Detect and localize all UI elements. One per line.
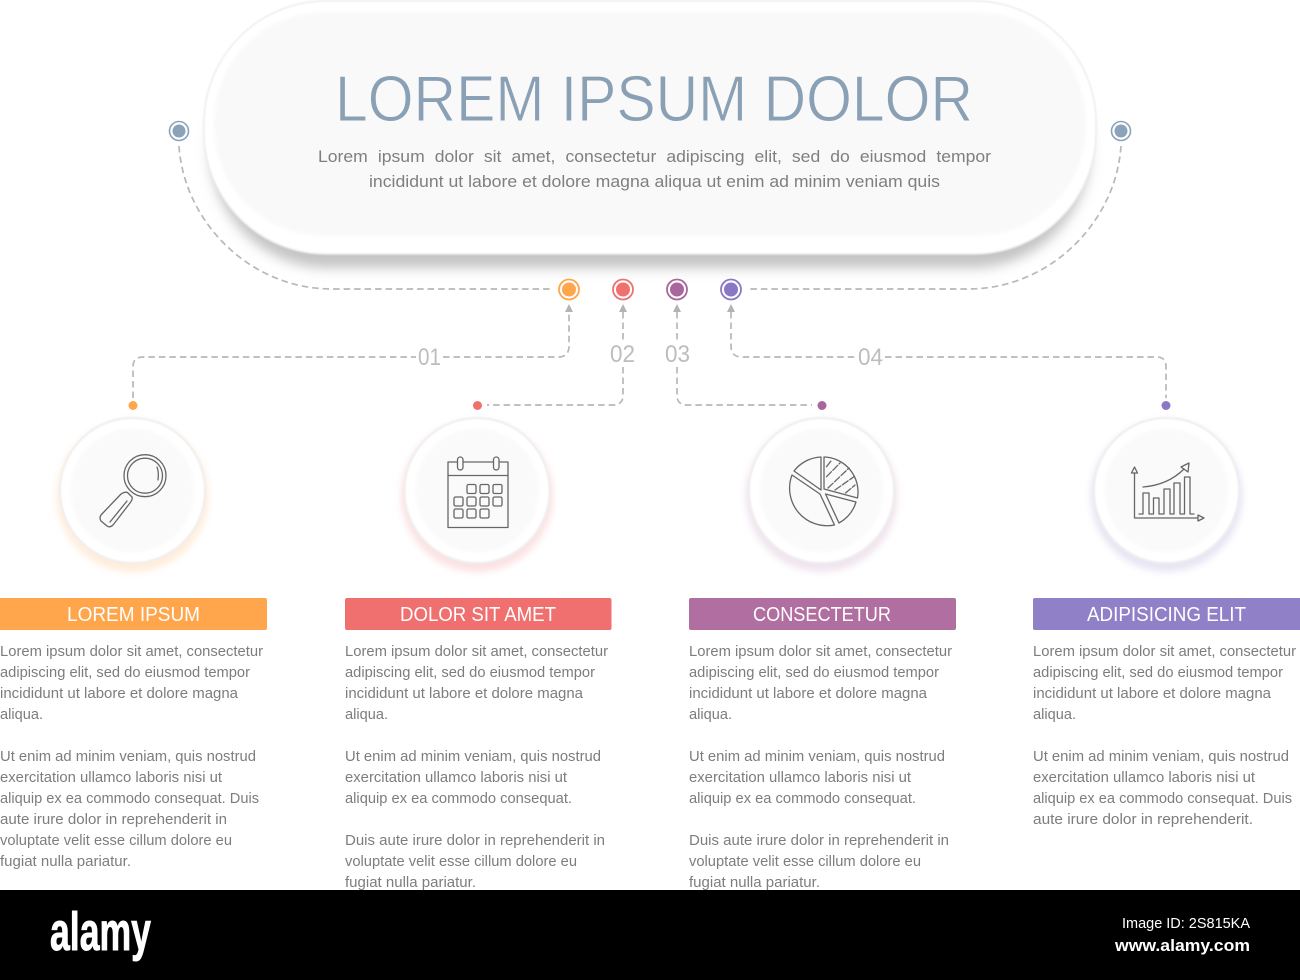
text block: column 4: aliqua. <box>1033 707 1076 723</box>
text block: column 2: Lorem ipsum dolor sit amet, consectetur <box>345 644 608 660</box>
panel: column 2 circle with calendar icon <box>401 418 553 572</box>
text block: column 3: aliqua. <box>689 707 732 723</box>
footer: watermark strip <box>0 890 1300 980</box>
text block: column 2: fugiat nulla pariatur. <box>345 875 476 891</box>
header bar: Lorem Ipsum <box>0 598 267 630</box>
dot: column 1 <box>128 401 138 410</box>
text block: column 3: Lorem ipsum dolor sit amet, consectetur <box>689 644 952 660</box>
marker: right node <box>1112 122 1130 140</box>
connector 03 with arrow <box>673 304 812 405</box>
text block: column 4: aute irure dolor in reprehenderit. <box>1033 812 1253 828</box>
header bar: Consectetur <box>689 598 956 630</box>
icon: growth chart <box>1132 463 1204 521</box>
panel: column 1 circle with magnifier icon <box>56 418 208 572</box>
text block: column 2: incididunt ut labore et dolore magna <box>345 686 584 702</box>
text block: column 1: fugiat nulla pariatur. <box>0 854 131 870</box>
text block: column 1: Ut enim ad minim veniam, quis nostrud <box>0 749 256 765</box>
icon: magnifier <box>100 455 166 527</box>
marker: purple node <box>667 280 687 300</box>
dot: column 4 <box>1162 401 1170 410</box>
text block: column 4: adipiscing elit, sed do eiusmod tempor <box>1033 665 1283 681</box>
text block: column 3 <box>689 644 952 891</box>
step number 01: 01 <box>418 344 441 371</box>
text block: column 1: Lorem ipsum dolor sit amet, consectetur <box>0 644 263 660</box>
dot: column 3 <box>818 401 826 410</box>
header bar: Dolor Sit Amet <box>345 598 612 630</box>
text block: column 3: fugiat nulla pariatur. <box>689 875 820 891</box>
header bar: Dolor Sit Amet: DOLOR SIT AMET <box>400 604 556 626</box>
text block: column 2: voluptate velit esse cillum dolore eu <box>345 854 577 870</box>
marker: violet node <box>721 280 741 300</box>
footer image id: Image ID: 2S815KA <box>1122 915 1250 932</box>
marker: orange node <box>559 280 579 300</box>
panel: column 4 circle with growth chart icon <box>1090 418 1242 572</box>
footer logo: alamy <box>50 902 151 962</box>
panel: column 3 circle with pie chart icon <box>746 418 898 572</box>
text block: column 4: Ut enim ad minim veniam, quis nostrud <box>1033 749 1289 765</box>
step number 04: 04 <box>858 344 883 371</box>
panel: main title pill <box>204 1 1096 268</box>
header bar: Adipisicing Elit: ADIPISICING ELIT <box>1087 604 1246 626</box>
subtitle text: Lorem ipsum dolor sit amet, consectetur adipiscing elit, sed do eiusmod tempor <box>318 147 991 166</box>
text block: column 4: incididunt ut labore et dolore magna <box>1033 686 1272 702</box>
text block: column 2: Duis aute irure dolor in reprehenderit in <box>345 833 605 849</box>
text block: column 3: Duis aute irure dolor in reprehenderit in <box>689 833 949 849</box>
icon: calendar <box>448 457 508 528</box>
text block: column 3: aliquip ex ea commodo consequat. <box>689 791 916 807</box>
connector 01 with arrow <box>133 304 573 398</box>
connector 02 with arrow <box>487 304 627 405</box>
text block: column 4 <box>1033 644 1296 828</box>
text block: column 1: voluptate velit esse cillum dolore eu <box>0 833 232 849</box>
text block: column 3: exercitation ullamco laboris nisi ut <box>689 770 911 786</box>
text block: column 4: aliquip ex ea commodo consequat. Duis <box>1033 791 1292 807</box>
marker: left node <box>170 122 188 140</box>
step number 03: 03 <box>665 341 690 368</box>
title: LOREM IPSUM DOLOR <box>335 62 973 135</box>
header bar: Consectetur: CONSECTETUR <box>753 604 891 626</box>
text block: column 2: aliquip ex ea commodo consequat. <box>345 791 572 807</box>
connector: right curve <box>747 146 1121 289</box>
text block: column 1: exercitation ullamco laboris nisi ut <box>0 770 222 786</box>
connector: left curve <box>179 146 553 289</box>
header bar: Lorem Ipsum: LOREM IPSUM <box>67 604 200 626</box>
text block: column 2: aliqua. <box>345 707 388 723</box>
text block: column 1: incididunt ut labore et dolore magna <box>0 686 239 702</box>
text block: column 4: Lorem ipsum dolor sit amet, consectetur <box>1033 644 1296 660</box>
text block: column 3: incididunt ut labore et dolore magna <box>689 686 928 702</box>
text block: column 1 <box>0 644 263 870</box>
footer website: www.alamy.com <box>1114 936 1250 955</box>
connector 04 with arrow <box>727 304 1166 398</box>
text block: column 1: aliqua. <box>0 707 43 723</box>
subtitle text <box>318 147 991 191</box>
text block: column 2: Ut enim ad minim veniam, quis nostrud <box>345 749 601 765</box>
text block: column 2 <box>345 644 608 891</box>
text block: column 1: adipiscing elit, sed do eiusmod tempor <box>0 665 250 681</box>
text block: column 2: adipiscing elit, sed do eiusmod tempor <box>345 665 595 681</box>
step number 02: 02 <box>610 341 635 368</box>
text block: column 1: aliquip ex ea commodo consequat. Duis <box>0 791 259 807</box>
text block: column 3: voluptate velit esse cillum dolore eu <box>689 854 921 870</box>
icon: pie chart <box>790 457 858 526</box>
header bar: Adipisicing Elit <box>1033 598 1300 630</box>
subtitle text: incididunt ut labore et dolore magna aliqua ut enim ad minim veniam quis <box>369 172 940 191</box>
text block: column 1: aute irure dolor in reprehenderit in <box>0 812 227 828</box>
text block: column 3: adipiscing elit, sed do eiusmod tempor <box>689 665 939 681</box>
text block: column 3: Ut enim ad minim veniam, quis nostrud <box>689 749 945 765</box>
marker: red node <box>613 280 633 300</box>
dot: column 2 <box>473 401 482 410</box>
text block: column 2: exercitation ullamco laboris nisi ut <box>345 770 567 786</box>
text block: column 4: exercitation ullamco laboris nisi ut <box>1033 770 1255 786</box>
